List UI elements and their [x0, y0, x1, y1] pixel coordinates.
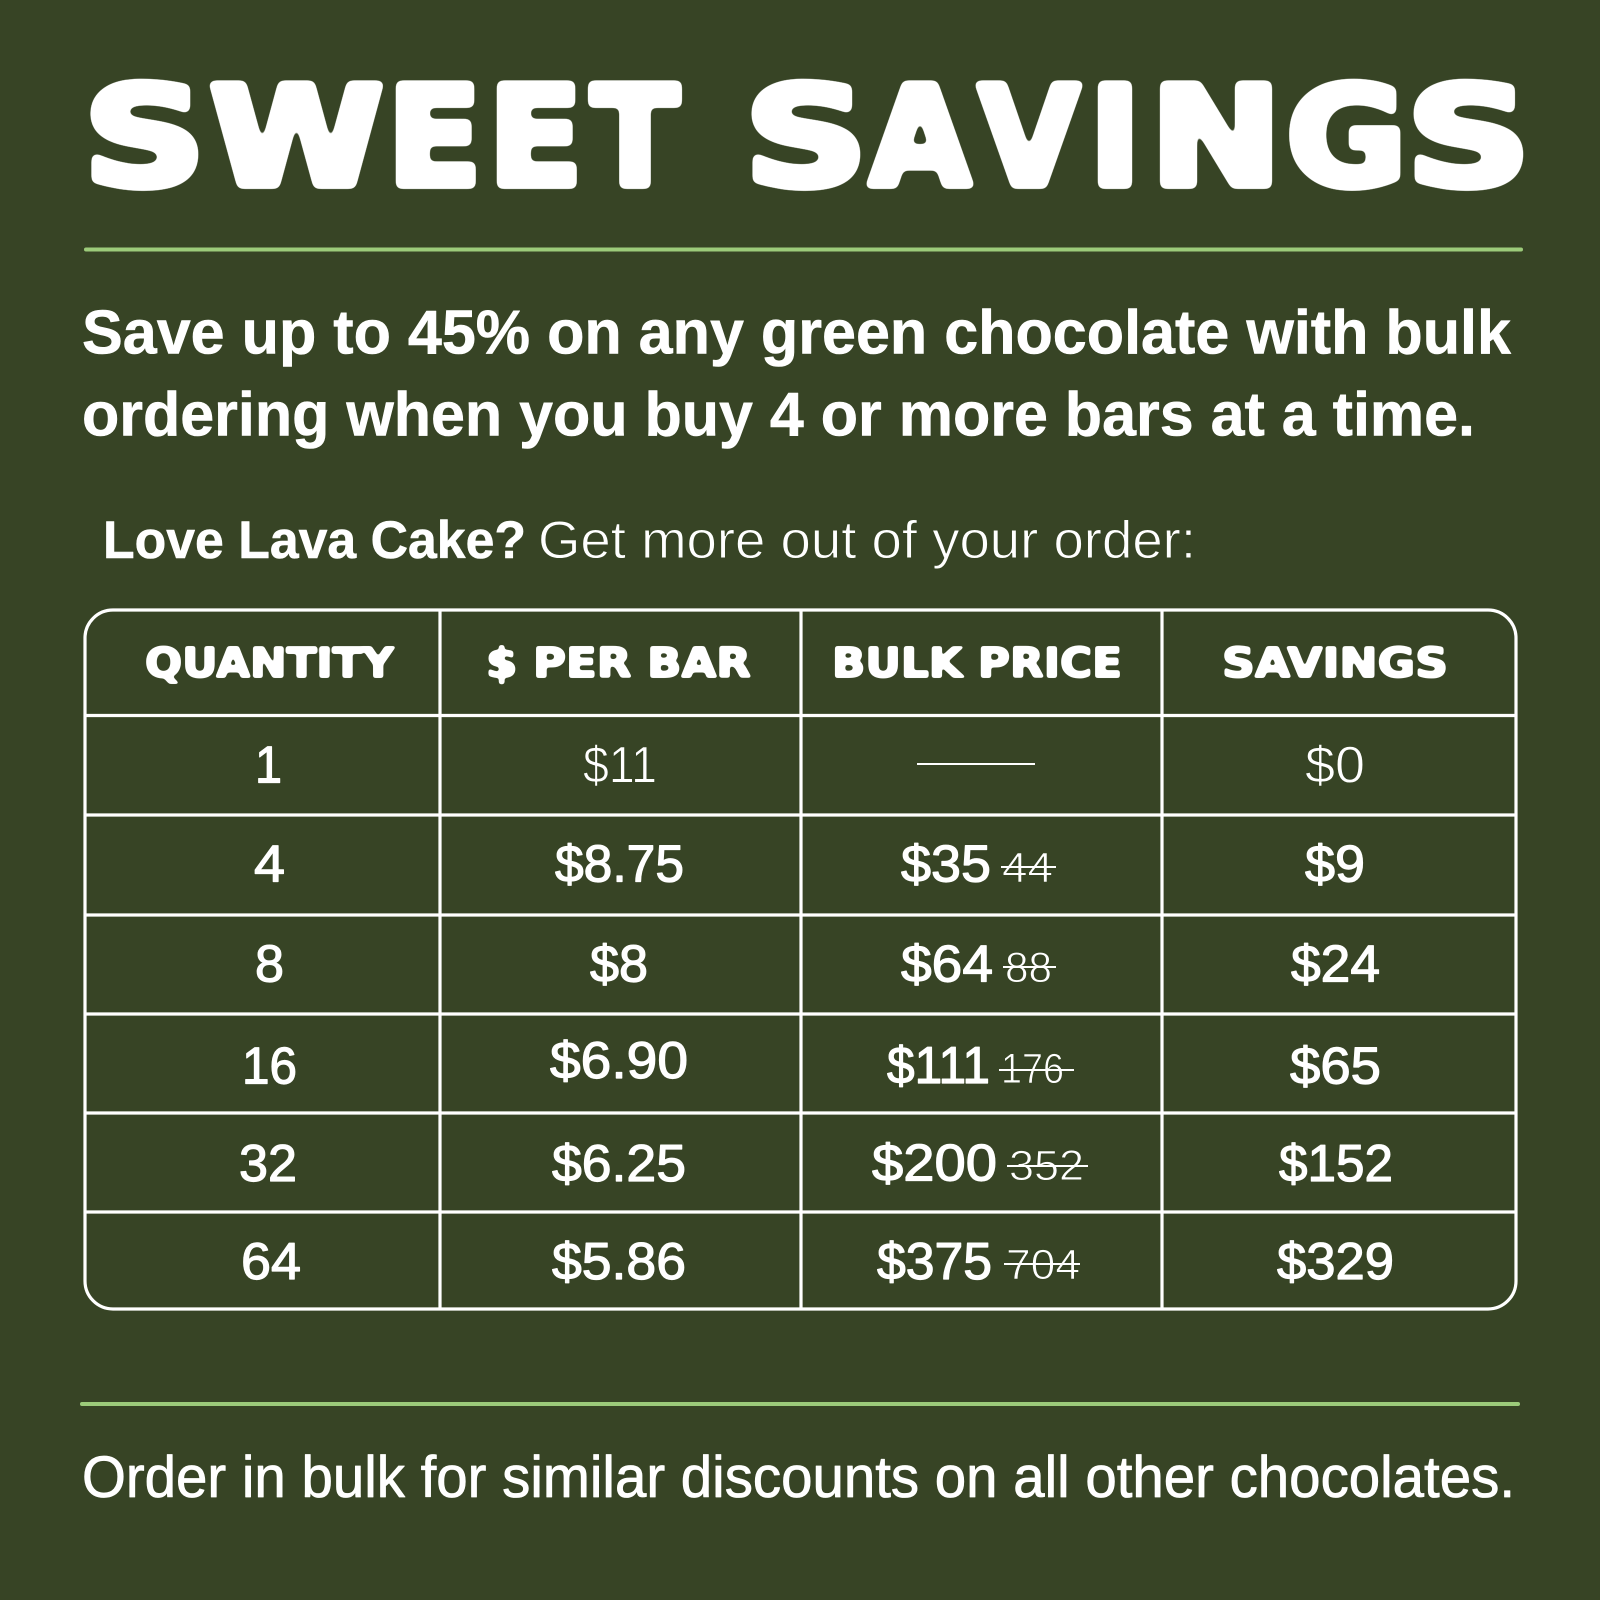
row: quantity 8: $24: [1291, 936, 1380, 994]
row: quantity 4: [254, 836, 1365, 894]
row: quantity 64: $375: [877, 1233, 992, 1291]
row: quantity 32: $200: [872, 1134, 997, 1192]
title: E: [387, 57, 482, 218]
table header row: SAVINGS: [1222, 639, 1448, 687]
title: V: [978, 57, 1080, 218]
row: quantity 32: 352: [1009, 1142, 1084, 1190]
intro text: ordering when you buy 4 or more bars at a time.: [82, 380, 1475, 450]
row: quantity 8: 8: [255, 936, 284, 994]
title: N: [1150, 57, 1282, 218]
row: quantity 32: $152: [1279, 1135, 1393, 1193]
row: quantity 32: 32: [239, 1135, 297, 1193]
title: W: [209, 57, 384, 218]
title: [83, 57, 1531, 218]
row: quantity 8: 88: [1005, 944, 1052, 992]
intro text: [82, 298, 1512, 450]
bottom divider: [82, 1402, 1518, 1406]
row: quantity 16: 16: [242, 1038, 297, 1096]
row: quantity 1: $0: [1305, 736, 1365, 794]
top divider: [86, 248, 1521, 252]
row: quantity 32: $6.25: [552, 1135, 686, 1193]
title: S: [1406, 57, 1531, 218]
table heading: Get more out of your order:: [538, 511, 1196, 570]
table header row: BULK PRICE: [832, 639, 1122, 687]
row: quantity 8: $8: [590, 936, 648, 994]
footer note: Order in bulk for similar discounts on all other chocolates.: [82, 1445, 1515, 1510]
table grid: [85, 610, 1516, 1309]
row: quantity 8: [255, 936, 1380, 994]
row: quantity 4: $9: [1305, 836, 1365, 894]
row: quantity 1: $11: [583, 736, 657, 794]
table header row: $ PER BAR: [486, 639, 751, 687]
row: quantity 16: $6.90: [550, 1032, 688, 1090]
intro text: Save up to 45% on any green chocolate with bulk: [82, 298, 1512, 368]
table heading: Love Lava Cake?: [103, 511, 526, 570]
title: G: [1286, 57, 1407, 218]
row: quantity 4: 4: [254, 836, 285, 894]
row: quantity 16: $111: [887, 1037, 990, 1095]
title: S: [83, 57, 206, 218]
row: quantity 32: [239, 1134, 1393, 1193]
row: quantity 8: $64: [901, 936, 993, 994]
title: T: [591, 57, 679, 218]
row: quantity 1: 1: [255, 736, 282, 794]
table header row: QUANTITY: [145, 639, 395, 687]
row: quantity 16: $65: [1290, 1038, 1381, 1096]
row: quantity 16: [242, 1032, 1381, 1096]
table heading: [103, 511, 1196, 570]
row: quantity 4: 44: [1002, 844, 1053, 892]
title: A: [869, 57, 971, 218]
row: quantity 16: 176: [1001, 1045, 1064, 1093]
row: quantity 1: [255, 736, 1365, 794]
pricing table: [85, 610, 1516, 1309]
row: quantity 4: $8.75: [555, 836, 684, 894]
title: S: [744, 57, 868, 218]
row: quantity 4: $35: [901, 836, 991, 894]
row: quantity 64: $329: [1277, 1233, 1394, 1291]
title: I: [1089, 57, 1141, 218]
row: quantity 64: $5.86: [552, 1233, 686, 1291]
row: quantity 64: [241, 1233, 1394, 1291]
row: quantity 64: 64: [241, 1233, 301, 1291]
title: E: [488, 57, 583, 218]
row: quantity 64: 704: [1006, 1241, 1080, 1289]
table header row: [145, 639, 1448, 687]
